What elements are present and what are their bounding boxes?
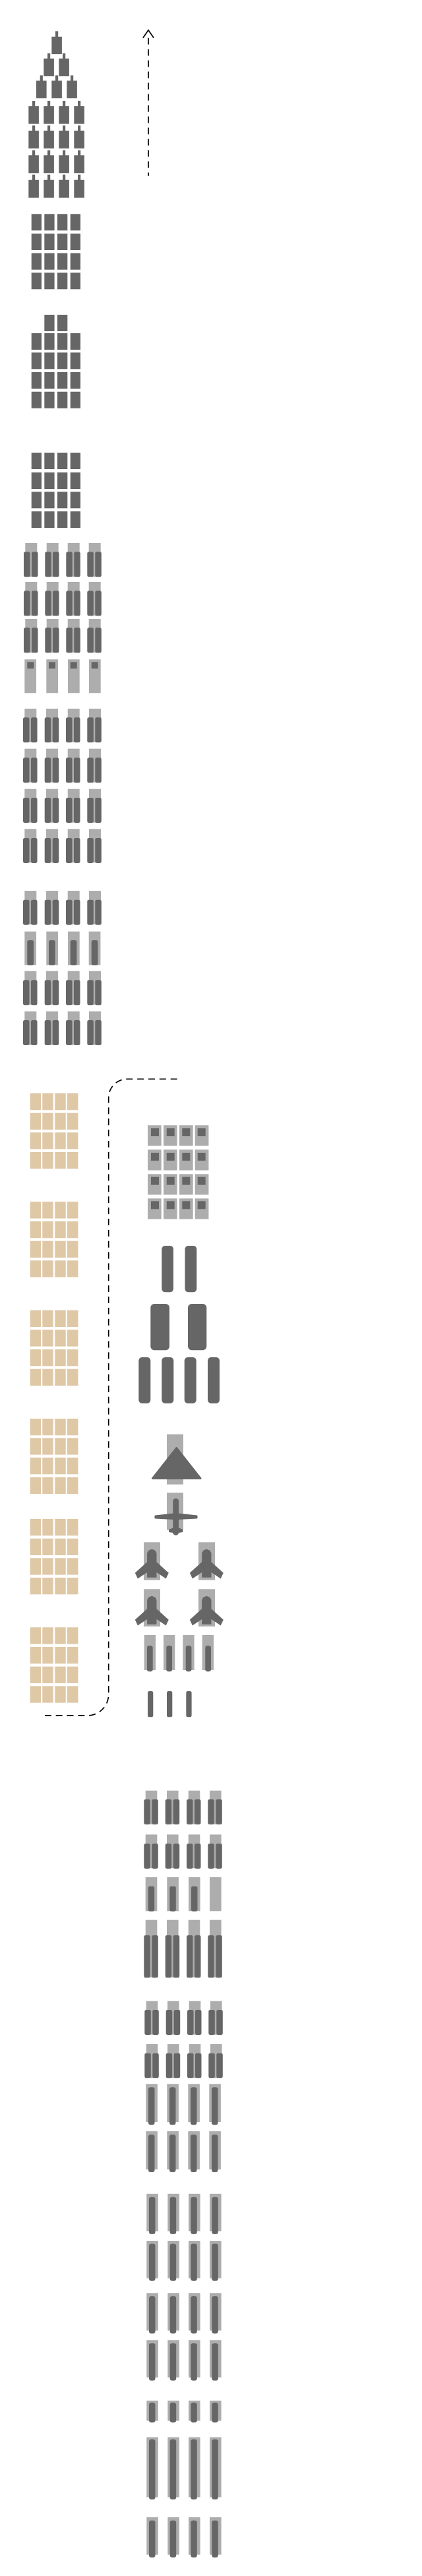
tan block 3 — [30, 1310, 78, 1386]
long row 7 — [146, 2517, 222, 2558]
long row 1 — [146, 2194, 222, 2234]
icon: swept wing jet, rear right — [190, 1589, 224, 1626]
group: twin rows and long single rows — [144, 2001, 223, 2172]
row 4 — [28, 101, 84, 124]
twin row 2 — [24, 582, 102, 616]
icon: delta wing aircraft — [153, 1434, 200, 1485]
long row 3 — [146, 2293, 222, 2333]
group: twin-pill rows with square-marked row — [24, 543, 102, 693]
tan block 2 — [30, 1202, 78, 1277]
twin row 1 — [23, 709, 102, 742]
arrow: dashed upward advance — [143, 30, 154, 176]
twin row 2 — [144, 2044, 223, 2078]
twin row 3 — [24, 619, 102, 653]
row of three slim dark bars — [148, 1691, 192, 1717]
twin row 2 — [23, 749, 102, 783]
icon: swept wing jet, front right — [190, 1542, 224, 1580]
row of four single-pill units — [144, 1635, 214, 1671]
single pill row — [24, 932, 100, 965]
row 1 — [51, 31, 62, 54]
long single row 2 — [146, 2131, 221, 2172]
group: twin and single pill rows — [23, 891, 102, 1045]
tan block 6 — [30, 1627, 78, 1703]
row 7 — [28, 175, 84, 198]
twin row 1 — [24, 543, 102, 577]
group: bottom long single columns — [146, 2194, 222, 2558]
twin row 1 — [144, 1791, 222, 1824]
tall twin row — [144, 1920, 222, 1978]
four narrow dark pills — [138, 1357, 220, 1403]
twin row 3 — [23, 971, 102, 1005]
twin row 1 — [23, 891, 102, 925]
long row 4 — [146, 2340, 222, 2381]
block: dark grid A — [32, 214, 80, 289]
twin row 4 — [23, 1012, 102, 1045]
tan block 1 — [30, 1093, 78, 1169]
two narrow dark pills — [162, 1246, 196, 1292]
block: dark grid B with two-unit head — [32, 315, 80, 408]
row 3 — [36, 75, 77, 98]
icon: straight wing aircraft — [154, 1493, 198, 1535]
group: mixed twin rows — [144, 1791, 222, 1978]
extra long row 6 — [146, 2437, 222, 2499]
row 6 — [28, 150, 84, 173]
row 2 — [44, 53, 69, 76]
twin row 3 — [23, 789, 102, 823]
square-marked row — [24, 659, 101, 693]
grey cell grid with dark squares — [148, 1125, 208, 1219]
formation: spearhead of nubbed units — [28, 31, 84, 198]
twin row 2 — [144, 1834, 222, 1869]
dashed route line around tan blocks — [45, 1079, 177, 1716]
long row 2 — [146, 2241, 222, 2281]
two wide dark pills — [150, 1304, 206, 1350]
group: four twin-pill rows — [23, 709, 102, 863]
short row 5 — [146, 2400, 222, 2422]
tan block 5 — [30, 1519, 78, 1594]
block: dark grid C — [32, 453, 80, 528]
icon: swept wing jet, front left — [135, 1542, 169, 1580]
twin row 1 — [144, 2001, 223, 2035]
twin row 4 — [23, 829, 102, 863]
single pill row with empty last unit — [146, 1877, 222, 1912]
row 5 — [28, 125, 84, 148]
icon: swept wing jet, rear left — [135, 1589, 169, 1626]
tan block 4 — [30, 1419, 78, 1494]
long single row 1 — [146, 2084, 221, 2125]
